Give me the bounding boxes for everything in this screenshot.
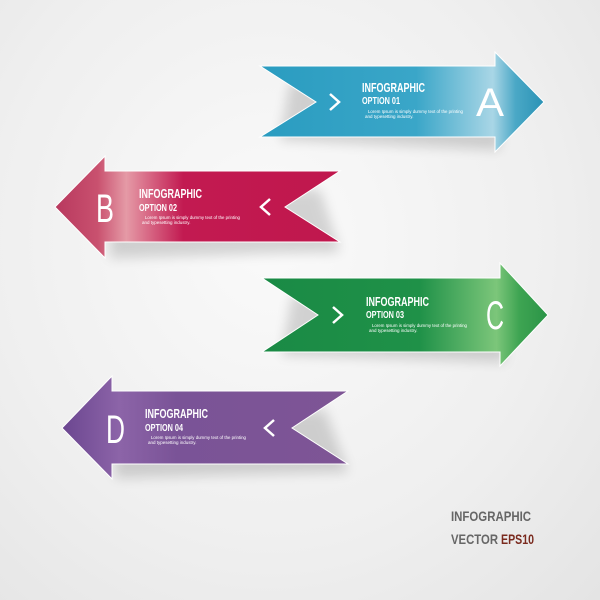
text B: and typesetting industry.: [142, 220, 190, 225]
footer caption: VECTOR: [451, 531, 498, 547]
arrow A: [260, 52, 544, 152]
footer caption: [451, 508, 534, 547]
chevron B: [261, 199, 270, 215]
letter B: B: [96, 187, 114, 231]
text B: INFOGRAPHIC: [139, 186, 202, 201]
arrow C: [262, 263, 548, 366]
text C: INFOGRAPHIC: [366, 294, 429, 309]
text D: OPTION 04: [145, 423, 183, 434]
text A: INFOGRAPHIC: [362, 80, 425, 95]
text B: OPTION 02: [139, 203, 177, 214]
letter A: A: [476, 81, 504, 125]
arrow B: [55, 156, 340, 258]
text B: Lorem Ipsum is simply dummy text of the printing: [145, 215, 240, 220]
text A: [362, 80, 463, 119]
text D: INFOGRAPHIC: [145, 406, 208, 421]
footer caption: EPS10: [501, 531, 534, 547]
text D: [145, 406, 246, 445]
arrow D: [62, 376, 348, 479]
text C: and typesetting industry.: [369, 328, 417, 333]
text C: [366, 294, 467, 333]
text D: and typesetting industry.: [148, 440, 196, 445]
chevron C: [333, 307, 342, 323]
letter D: D: [106, 408, 125, 452]
text C: Lorem Ipsum is simply dummy text of the printing: [372, 323, 467, 328]
chevron D: [265, 420, 274, 436]
footer caption: INFOGRAPHIC: [451, 508, 531, 524]
text D: Lorem Ipsum is simply dummy text of the printing: [151, 435, 246, 440]
text A: OPTION 01: [362, 96, 400, 107]
text A: and typesetting industry.: [365, 114, 413, 119]
letter C: C: [486, 294, 504, 338]
text B: [139, 186, 240, 225]
chevron A: [330, 94, 339, 110]
text C: OPTION 03: [366, 310, 404, 321]
text A: Lorem Ipsum is simply dummy text of the printing: [368, 109, 463, 114]
